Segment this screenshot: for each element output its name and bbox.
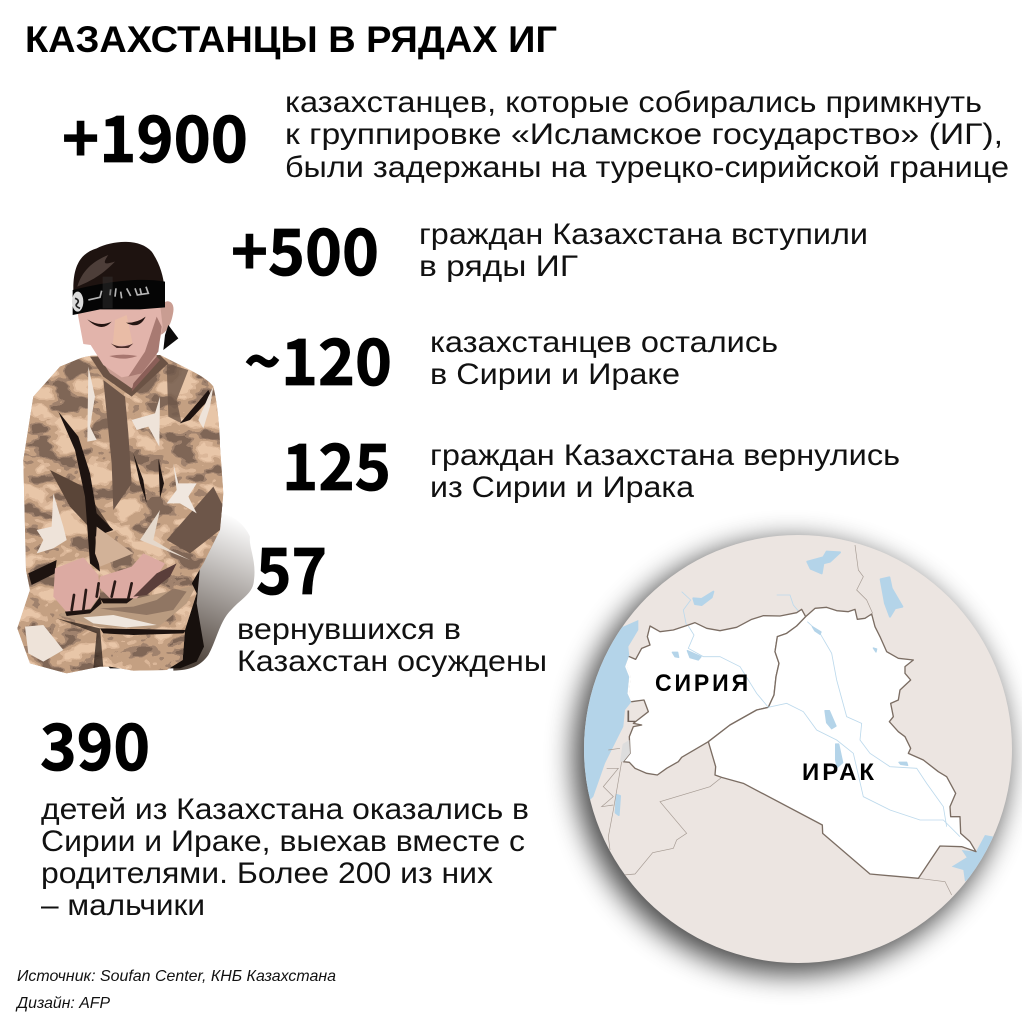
rivers outside <box>682 592 798 625</box>
stat: 57 <box>237 521 547 678</box>
shadow behind figure <box>173 513 255 671</box>
stat: +500: в ряды ИГ <box>419 250 578 283</box>
dark legs behind <box>30 567 204 668</box>
folded hem <box>58 585 197 628</box>
water: Persian Gulf <box>952 835 997 882</box>
Syria <box>623 609 806 775</box>
stat: 390: 390 <box>40 697 150 789</box>
stat: 390: Сирии и Ираке, выехав вместе с <box>41 825 525 858</box>
stat: 57: вернувшихся в <box>237 613 461 646</box>
lakes inside countries <box>672 627 908 767</box>
water: Mediterranean <box>584 620 638 800</box>
hands <box>53 557 100 614</box>
water: lakes outside <box>616 552 902 815</box>
map: Syria and Iraq <box>570 535 1012 974</box>
stat: 125: 125 <box>282 417 391 509</box>
stat: +1900: казахстанцев, которые собирались примкнуть <box>285 86 982 119</box>
stat: 390: родителями. Более 200 из них <box>41 857 493 890</box>
stat: 390: – мальчики <box>41 889 205 922</box>
source and credit: Источник: Soufan Center, КНБ Казахстана <box>17 968 336 985</box>
stat: 125: из Сирии и Ирака <box>430 471 694 504</box>
stat: +500: +500 <box>231 202 379 294</box>
stat: +1900: к группировке «Исламское государство» (ИГ), <box>285 118 1003 151</box>
stat: 390 <box>40 697 529 922</box>
thin neighbouring borders <box>602 545 952 895</box>
source and credit <box>15 968 336 1012</box>
ear <box>160 301 174 335</box>
stat: ~120 <box>244 312 778 404</box>
illustration: kneeling boy soldier <box>13 242 255 675</box>
stat: 125 <box>282 417 900 509</box>
rivers inside countries <box>688 622 960 837</box>
stat: 125: граждан Казахстана вернулись <box>430 439 900 472</box>
stat: ~120: казахстанцев остались <box>430 326 778 359</box>
gap between knees and under hem <box>57 618 103 668</box>
stat: +1900: +1900 <box>62 89 248 181</box>
title: КАЗАХСТАНЦЫ В РЯДАХ ИГ <box>25 19 557 60</box>
stat: 390: детей из Казахстана оказались в <box>41 793 529 826</box>
stat: ~120: ~120 <box>244 312 392 404</box>
stat: ~120: в Сирии и Ираке <box>430 358 680 391</box>
stat: +1900: были задержаны на турецко-сирийской границе <box>285 151 1009 184</box>
map disc <box>584 535 1012 963</box>
map label: Syria: СИРИЯ <box>655 670 751 697</box>
stat: 57: 57 <box>256 521 327 613</box>
drop shadow <box>574 541 1007 974</box>
stat: +500: граждан Казахстана вступили <box>419 218 868 251</box>
Iraq <box>708 607 976 878</box>
coastal cover <box>626 657 632 701</box>
collar and neck <box>90 355 168 397</box>
hair and cap <box>73 242 164 295</box>
stat: +500 <box>231 202 868 294</box>
stat: 57: Казахстан осуждены <box>237 645 547 678</box>
camouflage uniform <box>13 352 230 675</box>
map label: Lebanon: L <box>626 707 636 726</box>
map label: Iraq: ИРАК <box>802 759 877 786</box>
stat: +1900 <box>62 86 1009 184</box>
headband with script <box>73 280 165 315</box>
headband knot <box>163 325 178 350</box>
face <box>77 303 163 377</box>
source and credit: Дизайн: AFP <box>15 995 110 1012</box>
